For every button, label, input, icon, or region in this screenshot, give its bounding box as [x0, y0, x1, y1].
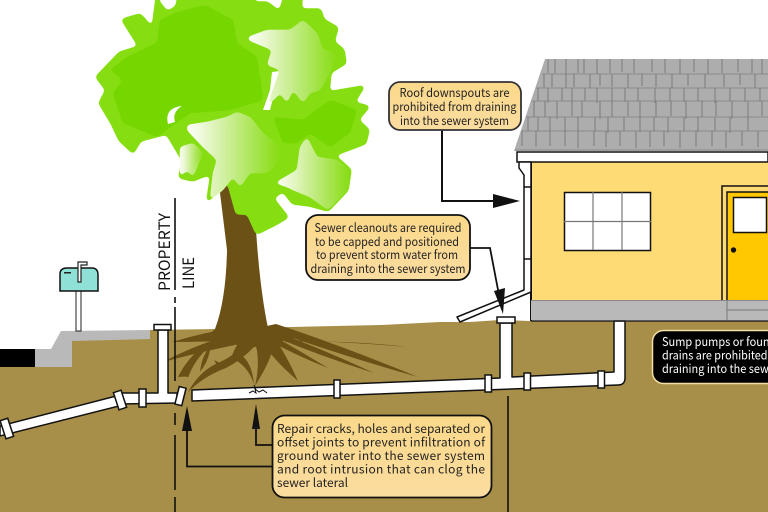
callout: repair cracks: and root intrusion that can clog the	[277, 460, 485, 478]
tree	[97, 0, 418, 392]
callout: roof downspouts	[389, 82, 521, 130]
tree foliage	[97, 0, 368, 233]
property line	[153, 198, 199, 512]
callout: repair cracks: sewer lateral	[277, 474, 348, 491]
callout: sewer cleanouts: Sewer cleanouts are required	[314, 219, 462, 236]
house	[457, 59, 768, 322]
vertical line under lateral	[507, 396, 509, 512]
curb and sidewalk	[35, 330, 150, 367]
property line label: PROPERTY	[153, 212, 175, 291]
callout: roof downspouts: Roof downspouts are	[400, 84, 510, 101]
callout: roof downspouts: prohibited from draining	[392, 98, 517, 115]
callout: sump pumps	[652, 330, 768, 384]
mailbox	[60, 262, 98, 331]
door	[722, 186, 768, 300]
pipe crack	[249, 385, 267, 393]
window	[564, 192, 651, 250]
arrow: roof downspouts	[442, 130, 520, 208]
road	[0, 349, 35, 367]
roof	[514, 59, 768, 151]
arrow: repair offset joint	[182, 406, 272, 466]
gutter and downspout	[457, 162, 531, 322]
callout: roof downspouts: into the sewer system	[400, 112, 509, 129]
ground	[0, 320, 768, 512]
callout: repair cracks: Repair cracks, holes and separated or	[277, 420, 485, 437]
fascia	[517, 152, 768, 162]
callout: sewer cleanouts	[306, 215, 470, 280]
callout: sewer cleanouts: to prevent storm water from	[316, 246, 458, 263]
arrow: repair crack	[252, 404, 272, 445]
callout: sewer cleanouts: to be capped and positioned	[315, 233, 459, 250]
property line: LINE	[177, 257, 199, 289]
foundation	[531, 300, 768, 320]
callout: repair cracks: ground water into the sewer system	[277, 447, 485, 464]
callout: repair cracks: offset joints to prevent infiltration of	[277, 434, 486, 450]
tree trunk and roots	[163, 178, 418, 392]
arrow: sewer cleanouts	[470, 248, 505, 314]
callout: repair cracks	[272, 416, 492, 498]
house wall	[531, 162, 768, 301]
white gaps in foliage	[167, 71, 280, 124]
light foliage highlights	[248, 20, 337, 107]
callout: sewer cleanouts: draining into the sewer system	[310, 260, 466, 277]
dark foliage	[110, 5, 263, 137]
sewer lateral left section	[0, 324, 186, 439]
sewer lateral main section	[192, 317, 625, 401]
